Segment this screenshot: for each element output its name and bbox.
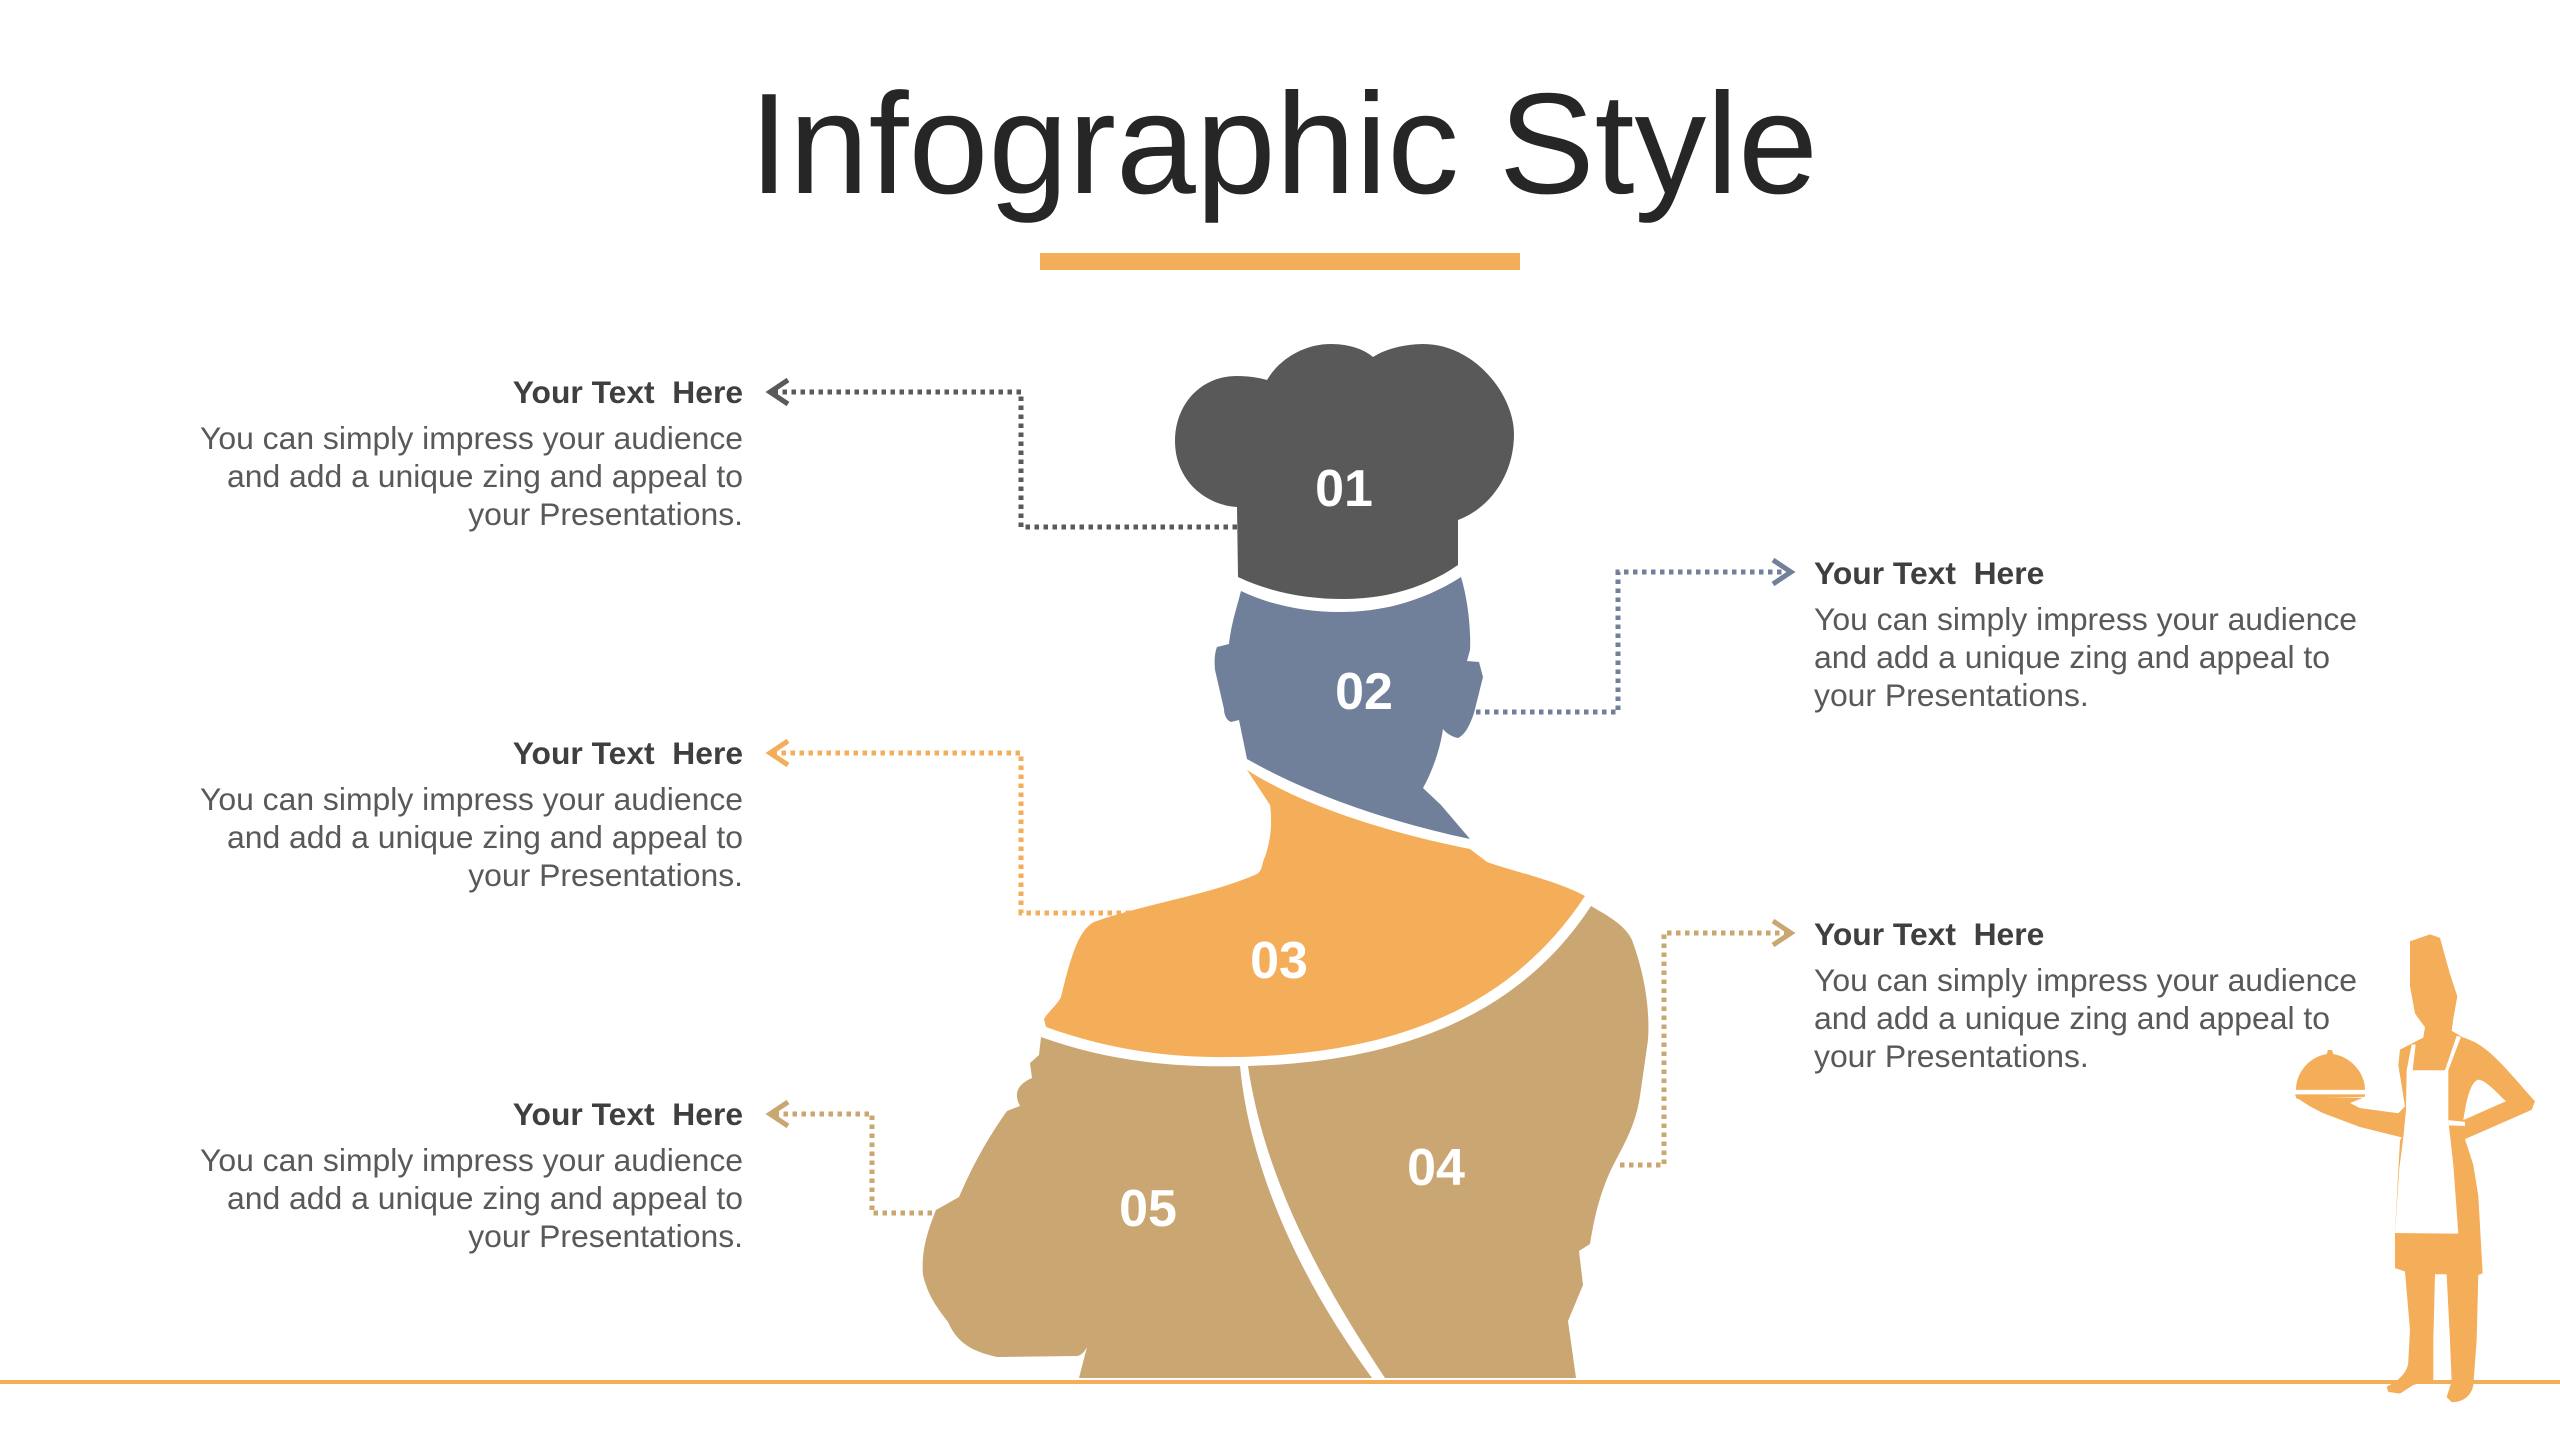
cloche dome <box>2296 1050 2365 1090</box>
text block 02 <box>1814 555 2357 713</box>
text block 03 <box>200 735 743 893</box>
text block 05: You can simply impress your audience <box>200 1142 743 1178</box>
text block 05: your Presentations. <box>468 1218 743 1254</box>
connector 02 with arrow <box>1476 560 1791 712</box>
title: Infographic Style <box>749 64 1818 224</box>
segment 02: head <box>1215 577 1483 839</box>
segment 05: left torso and arm <box>923 1037 1372 1378</box>
connector 05 with arrow <box>770 1102 932 1213</box>
text block 01 <box>200 374 743 532</box>
arm cut-out <box>2463 1080 2506 1120</box>
text block 05: and add a unique zing and appeal to <box>227 1180 743 1216</box>
text block 04: You can simply impress your audience <box>1814 962 2357 998</box>
text block 04: and add a unique zing and appeal to <box>1814 1000 2330 1036</box>
text block 04: your Presentations. <box>1814 1038 2089 1074</box>
text block 04 <box>1814 916 2357 1074</box>
text block 01: Your Text Here <box>513 374 743 410</box>
segment 03: shoulders <box>1044 770 1585 1057</box>
text block 02: and add a unique zing and appeal to <box>1814 639 2330 675</box>
apron tie <box>2448 1120 2465 1126</box>
text block 03: You can simply impress your audience <box>200 781 743 817</box>
text block 02: your Presentations. <box>1814 677 2089 713</box>
connector 03 with arrow <box>770 741 1130 913</box>
text block 02: Your Text Here <box>1814 555 2044 591</box>
segment 03: shoulders: 03 <box>1250 932 1308 990</box>
text block 01: You can simply impress your audience <box>200 420 743 456</box>
segment 02: head: 02 <box>1335 663 1393 721</box>
text block 03: and add a unique zing and appeal to <box>227 819 743 855</box>
text block 03: your Presentations. <box>468 857 743 893</box>
white apron <box>2395 1036 2461 1234</box>
text block 04: Your Text Here <box>1814 916 2044 952</box>
text block 03: Your Text Here <box>513 735 743 771</box>
connector 01 with arrow <box>770 380 1237 527</box>
text block 01: and add a unique zing and appeal to <box>227 458 743 494</box>
chef body silhouette <box>2297 934 2535 1402</box>
segment 01: chef hat <box>1175 344 1514 599</box>
chef head illustration <box>923 344 1648 1378</box>
segment 04: right torso: 04 <box>1407 1139 1465 1197</box>
segment 04: right torso <box>1248 906 1648 1378</box>
segment 05: left torso and arm: 05 <box>1119 1180 1177 1238</box>
connector 04 with arrow <box>1620 921 1791 1165</box>
segment 01: chef hat: 01 <box>1315 460 1373 518</box>
icon: waiter chef holding cloche <box>2295 934 2535 1402</box>
text block 05 <box>200 1096 743 1254</box>
title underline <box>1040 253 1520 270</box>
text block 02: You can simply impress your audience <box>1814 601 2357 637</box>
cloche tray <box>2295 1094 2365 1099</box>
text block 01: your Presentations. <box>468 496 743 532</box>
ground line <box>0 1380 2560 1384</box>
text block 05: Your Text Here <box>513 1096 743 1132</box>
